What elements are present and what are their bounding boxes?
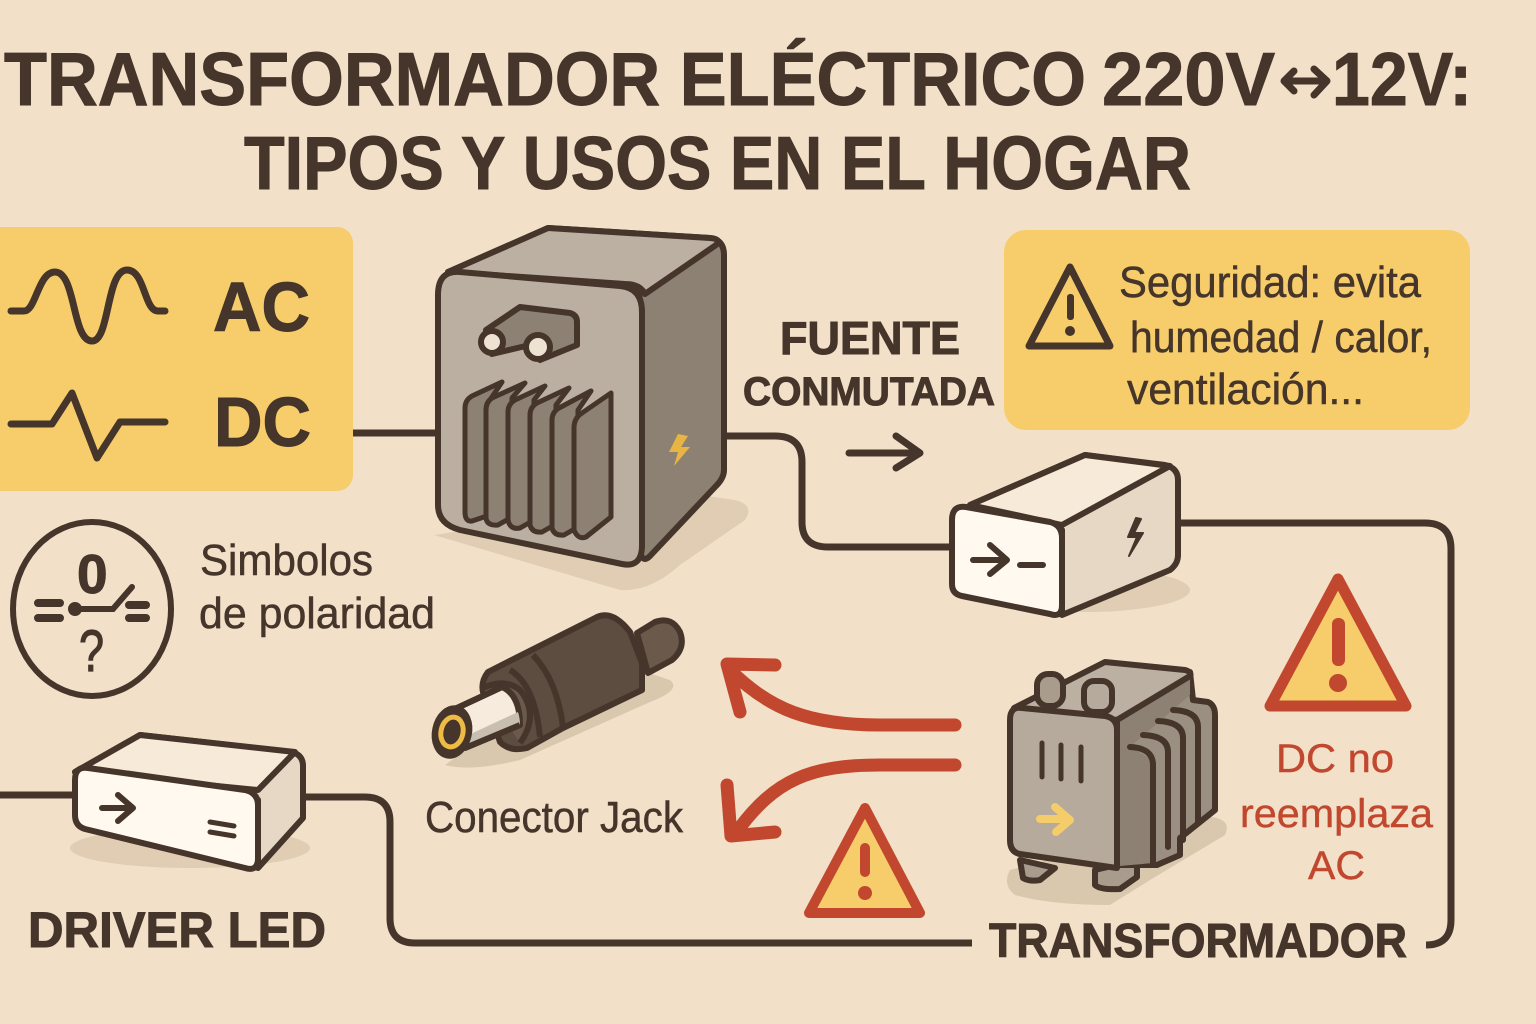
label: fuente conmutada [743, 312, 995, 414]
text: DC warning: AC [1308, 844, 1365, 888]
label: polarity symbols [199, 536, 435, 638]
icon: polarity symbols [13, 522, 171, 696]
icon: LED driver [70, 735, 310, 869]
label: polarity symbols: Simbolos [200, 536, 373, 585]
icon: arrow and dash [973, 545, 1043, 574]
label: transformador: TRANSFORMADOR [989, 915, 1407, 968]
icon: DC equals [210, 822, 234, 836]
panel: AC and DC [0, 227, 353, 491]
wire: input to LED driver [0, 792, 80, 798]
icon: yellow arrow [1040, 807, 1070, 832]
text: safety: humedad / calor, [1130, 313, 1432, 362]
icon: lower warning [809, 808, 920, 913]
icon: jack connector [430, 615, 682, 768]
label: AC: AC [213, 268, 310, 346]
wire: module to transformer label [1175, 523, 1451, 945]
arrow: red upper [727, 664, 955, 725]
title: TRANSFORMADOR ELÉCTRICO [4, 37, 1086, 121]
arrow: right [849, 436, 920, 468]
title [4, 37, 1472, 205]
label: fuente conmutada: FUENTE [780, 312, 960, 364]
icon: transformer [1007, 662, 1227, 905]
icon: polarity symbols: 0 [77, 543, 108, 605]
text: safety: ventilación... [1127, 365, 1364, 414]
arrow: red lower [727, 765, 955, 836]
panel: safety warning [1004, 230, 1470, 430]
label: driver LED: DRIVER LED [28, 902, 326, 958]
icon: lightning [669, 434, 690, 466]
text: safety: Seguridad: evita [1119, 258, 1421, 307]
wire: AC/DC panel to adapter [350, 430, 445, 436]
icon: cooling fins [465, 382, 611, 538]
icon: DC wave [11, 393, 165, 458]
label: DC: DC [214, 383, 311, 461]
label: fuente conmutada: CONMUTADA [743, 370, 995, 414]
wire: adapter to white module [722, 436, 955, 547]
text: DC warning: reemplaza [1240, 792, 1434, 836]
icon: upper right warning [1270, 579, 1406, 706]
icon: bolt [1128, 518, 1143, 556]
wire: transformer label to LED driver [300, 797, 972, 943]
label: polarity symbols: de polaridad [199, 589, 435, 638]
text: safety [1119, 258, 1432, 414]
icon: AC wave [11, 270, 165, 341]
label: jack connector: Conector Jack [425, 793, 684, 842]
icon: white converter module [952, 455, 1190, 615]
title: TIPOS Y USOS EN EL HOGAR [244, 121, 1191, 205]
icon: double arrow [1284, 69, 1327, 95]
text: DC warning: DC no [1276, 737, 1394, 781]
icon: polarity symbols: ? [79, 619, 104, 684]
icon: warning triangle [1029, 267, 1110, 346]
title: 12V: [1332, 37, 1472, 121]
icon: right arrow [102, 795, 133, 821]
icon: main power adapter [434, 228, 748, 590]
title: 220V [1102, 37, 1275, 121]
text: DC warning [1240, 737, 1434, 888]
icon: plug pins [481, 307, 577, 360]
